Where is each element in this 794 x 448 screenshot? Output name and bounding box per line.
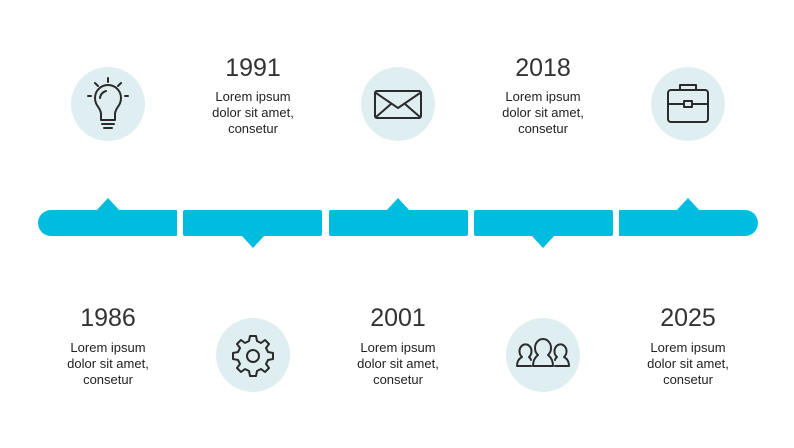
- entry 2018: Lorem ipsum: [505, 89, 581, 104]
- icon: lightbulb: [71, 67, 145, 141]
- entry 1986: Lorem ipsum: [70, 340, 146, 355]
- icon: briefcase: [651, 67, 725, 141]
- entry 1991: 1991: [225, 54, 281, 82]
- entry 2025: [647, 304, 729, 387]
- entry 2018: dolor sit amet,: [502, 105, 584, 120]
- entry 2001: consetur: [373, 372, 424, 387]
- entry 2018: [502, 54, 584, 136]
- entry 1991: dolor sit amet,: [212, 105, 294, 120]
- timeline bar: [38, 198, 758, 248]
- entry 2001: 2001: [370, 304, 426, 332]
- entry 2018: 2018: [515, 54, 571, 82]
- entry 2025: consetur: [663, 372, 714, 387]
- entry 2025: dolor sit amet,: [647, 356, 729, 371]
- entry 1991: Lorem ipsum: [215, 89, 291, 104]
- entry 1986: [67, 304, 149, 387]
- entry 1991: consetur: [228, 121, 279, 136]
- entry 2001: [357, 304, 439, 387]
- entry 1986: 1986: [80, 304, 136, 332]
- entry 1991: [212, 54, 294, 136]
- entry 1986: consetur: [83, 372, 134, 387]
- entry 2001: Lorem ipsum: [360, 340, 436, 355]
- icon: envelope: [361, 67, 435, 141]
- icon: gear: [216, 318, 290, 392]
- entry 2025: Lorem ipsum: [650, 340, 726, 355]
- entry 1986: dolor sit amet,: [67, 356, 149, 371]
- icon: people: [506, 318, 580, 392]
- entry 2001: dolor sit amet,: [357, 356, 439, 371]
- entry 2018: consetur: [518, 121, 569, 136]
- entry 2025: 2025: [660, 304, 716, 332]
